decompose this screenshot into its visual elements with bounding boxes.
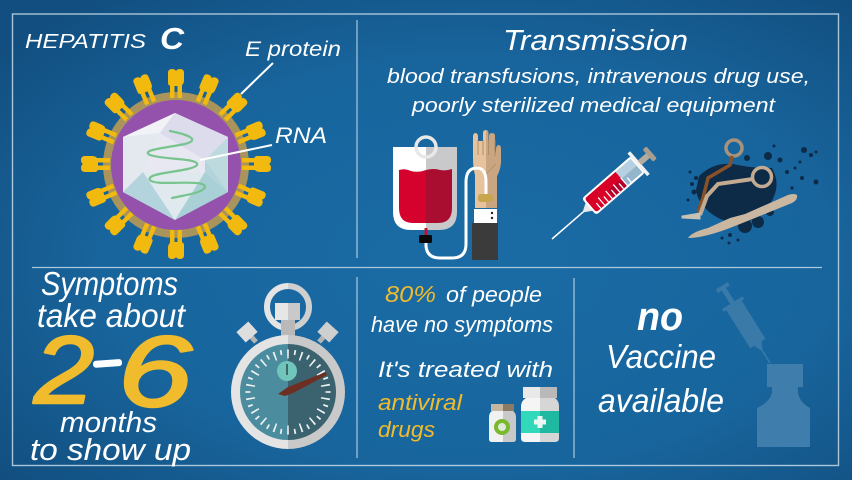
title: hepatitis C: C <box>160 21 185 56</box>
face <box>240 344 288 440</box>
text: treatment: It's treated with <box>378 357 553 382</box>
icon: contaminated instruments <box>682 140 818 244</box>
text: no vaccine available: Vaccine <box>606 338 716 375</box>
transmission description: poorly sterilized medical equipment <box>411 95 777 117</box>
bandage <box>478 194 493 202</box>
transmission description: blood transfusions, intravenous drug use, <box>387 66 810 88</box>
RNA strand <box>148 131 205 198</box>
callout: RNA <box>200 123 327 160</box>
text: months to show up: to show up <box>30 432 191 467</box>
blood bag <box>393 137 457 243</box>
callout: RNA: RNA <box>275 123 327 148</box>
dirt splatter <box>686 144 818 244</box>
text: months to show up: months <box>60 407 157 439</box>
text: no vaccine available <box>598 295 724 419</box>
scalpel <box>688 194 797 238</box>
text: treatment <box>378 357 553 442</box>
tick marks <box>248 352 328 432</box>
icon: syringe <box>542 141 661 250</box>
text: treatment: drugs <box>378 417 435 442</box>
small dial <box>277 361 297 381</box>
ghost icon: vial <box>757 364 810 447</box>
text: treatment: antiviral <box>378 390 463 415</box>
text: 80% of people: have no symptoms <box>371 312 553 337</box>
number: 2-6: 6 <box>118 316 192 428</box>
icon: medicine bottles <box>489 387 559 442</box>
text: symptoms take about: Symptoms <box>41 265 178 302</box>
top ring <box>267 286 309 328</box>
callout: E protein: E protein <box>245 38 341 61</box>
text: 80% of people <box>371 281 553 337</box>
side buttons <box>236 321 339 343</box>
transmission description <box>387 66 810 117</box>
text: no vaccine available: no <box>637 295 683 339</box>
outer envelope <box>103 92 249 238</box>
icon: stopwatch <box>231 286 345 449</box>
spikes <box>81 69 271 259</box>
case <box>231 335 288 449</box>
cuff and sleeve <box>472 209 498 260</box>
title: hepatitis C <box>25 21 185 56</box>
text: no vaccine available: available <box>598 382 724 419</box>
heading: transmission: Transmission <box>503 25 688 57</box>
number: 2-6 <box>33 316 192 428</box>
text: 80% of people: of people <box>446 282 542 307</box>
text: 80% of people: 80% <box>385 281 436 307</box>
virus diagram <box>81 69 271 259</box>
large bottle <box>521 387 559 442</box>
text: symptoms take about <box>37 265 187 334</box>
hand <box>278 372 327 396</box>
title: hepatitis C: HEPATITIS <box>25 31 147 53</box>
capsid <box>123 113 228 220</box>
scissors <box>682 140 772 219</box>
tube <box>426 168 486 258</box>
text: months to show up <box>30 407 191 467</box>
text: symptoms take about: take about <box>37 297 187 334</box>
icon: blood bag and arm <box>393 130 501 260</box>
stem and crown <box>275 303 300 336</box>
ghost icon: syringe <box>712 279 780 369</box>
small bottle <box>489 404 516 442</box>
callout: E protein <box>241 38 341 94</box>
membrane <box>111 100 241 230</box>
number: 2-6: 2 <box>33 317 94 424</box>
hand <box>473 130 501 208</box>
